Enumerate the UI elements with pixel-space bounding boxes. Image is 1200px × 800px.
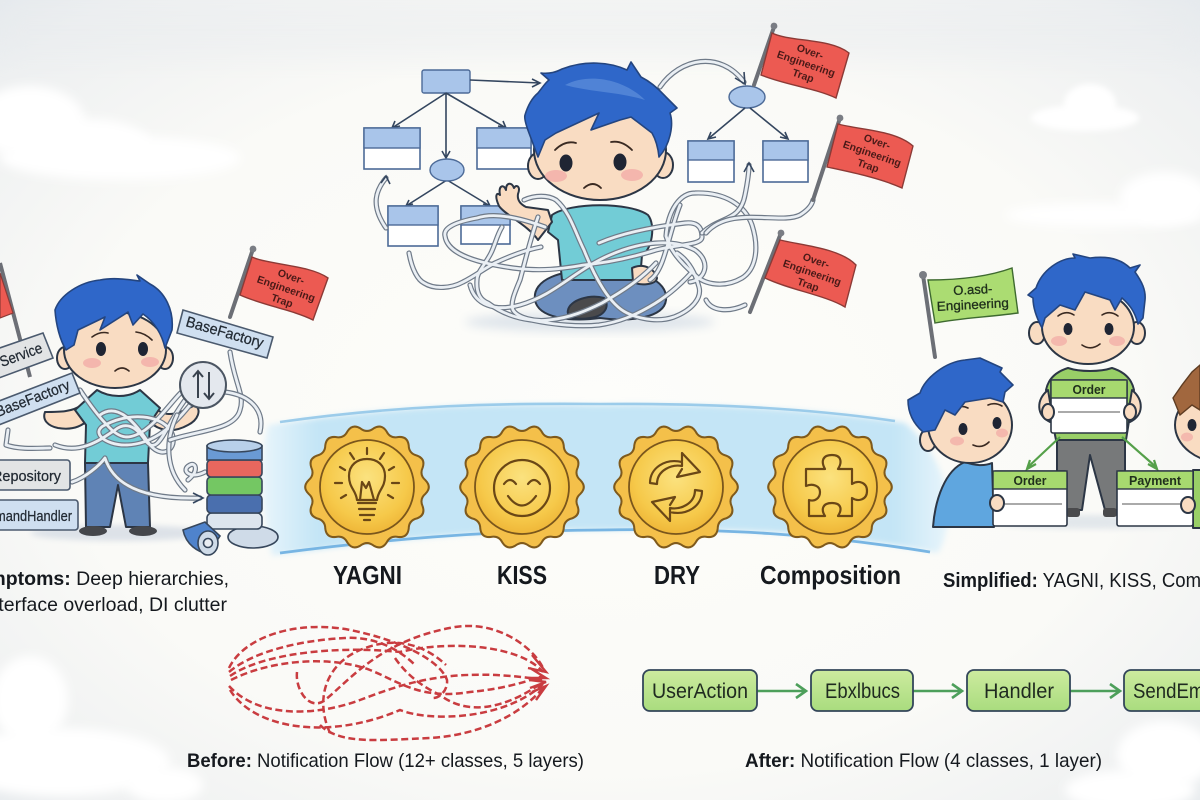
flag: over-engineering trap 1: Trap (791, 67, 815, 85)
card: Order (993, 471, 1067, 526)
icon: refresh arrows (650, 453, 702, 521)
database stack (183, 440, 278, 555)
label: Repository (0, 460, 70, 490)
ground shadow (465, 312, 715, 332)
legs (535, 271, 666, 319)
flag: over-engineering trap 1: Engineering (775, 49, 837, 80)
arrowheads (528, 655, 546, 700)
face (64, 312, 166, 388)
icon: light bulb (335, 448, 399, 520)
flag: over-engineering trap: Trap (270, 292, 294, 310)
after diagram: simple flow (643, 670, 1200, 711)
flag: over-engineering trap 3: Over- (801, 251, 831, 271)
badge labels: KISS (497, 560, 547, 590)
ears (1029, 322, 1145, 344)
flag: over-engineering trap 1: Over- (795, 42, 825, 62)
flag: over-engineering trap: Over- (276, 267, 306, 287)
middle child (1028, 254, 1145, 517)
badge labels: Composition (760, 560, 901, 590)
flag: over-engineering trap 2: Engineering (841, 139, 903, 170)
blush left (545, 170, 567, 182)
card: Order (1051, 380, 1127, 433)
sad mouth (584, 184, 601, 188)
card: Order: Order (1014, 473, 1046, 488)
card: Order: Order (1072, 382, 1106, 397)
ear (920, 429, 936, 451)
ground shadow (30, 525, 210, 541)
wires from the tangle to right chart and flags (702, 163, 813, 310)
shirt (1046, 368, 1134, 440)
green arrows (1027, 437, 1157, 469)
wires (409, 193, 756, 326)
arrows (757, 684, 1120, 698)
ground shadow (990, 515, 1190, 529)
pants (85, 463, 150, 527)
shirt (75, 390, 160, 463)
box: EventBus (811, 670, 913, 711)
shoe (568, 297, 607, 319)
pants (1057, 438, 1125, 510)
badge labels: DRY (654, 560, 700, 590)
eyes and smile (952, 404, 1002, 446)
box: EventBus: Ebxlbucs (825, 680, 900, 703)
left flag (0, 263, 30, 377)
center scene: flowchart on left (364, 70, 540, 246)
box: Handler (967, 670, 1070, 711)
badge labels: YAGNI (333, 560, 402, 590)
hair (55, 275, 172, 350)
hair (1028, 254, 1145, 328)
hair (908, 358, 1013, 432)
face (1042, 290, 1134, 364)
hand (1181, 497, 1195, 513)
blush right (621, 169, 643, 181)
eye (1188, 419, 1196, 431)
eyes and brows (555, 142, 632, 172)
eyes and smile (1058, 313, 1118, 348)
arms and hands (44, 405, 199, 430)
gold badge: Composition (768, 427, 892, 547)
shirt (548, 205, 652, 280)
blush (1181, 432, 1193, 442)
body (1193, 470, 1200, 528)
label: Service (0, 333, 53, 382)
mouth and brows (92, 332, 152, 371)
box: UserAction (643, 670, 757, 711)
green flag: Engineering (936, 295, 1009, 314)
card: Payment (1117, 471, 1193, 526)
center scene: flowchart on right (660, 61, 808, 182)
flag: over-engineering trap 3: Trap (796, 276, 820, 294)
right child (brown hair) (1117, 365, 1200, 528)
flag: over-engineering trap 2 (813, 115, 913, 200)
ear left (528, 153, 548, 179)
icon: puzzle piece (806, 455, 867, 516)
shoes (79, 526, 157, 536)
center child tangled in wires (409, 62, 756, 332)
flag: over-engineering trap 3: Engineering (781, 258, 843, 289)
symptoms caption (0, 568, 229, 616)
box: Handler: Handler (984, 680, 1054, 703)
icon: smiley (494, 460, 550, 516)
ear right (653, 152, 673, 178)
hand (990, 495, 1004, 511)
ears (57, 347, 173, 369)
wire tangle (6, 352, 261, 503)
hair (525, 62, 677, 157)
left scene: child with factory labels (0, 246, 328, 555)
arms (1039, 390, 1141, 422)
flag: over-engineering trap (230, 246, 328, 320)
gold badge: DRY (614, 427, 738, 547)
flag: over-engineering trap 1 (754, 23, 849, 98)
badge labels (333, 560, 901, 590)
face (534, 100, 666, 200)
flag: over-engineering trap 2: Trap (856, 157, 880, 175)
label: BaseFactory right: BaseFactory (184, 314, 266, 352)
hair highlight (565, 79, 645, 100)
eyes (96, 342, 148, 356)
brown hair (1173, 365, 1200, 415)
before caption: Before: Notification Flow (12+ classes, 5 layers) (187, 750, 584, 772)
gold badge: YAGNI (305, 427, 429, 547)
after caption: After: Notification Flow (4 classes, 1 layer) (745, 750, 1102, 772)
green flag (919, 268, 1018, 357)
face (1175, 387, 1200, 463)
before diagram: tangled red dashed flow (229, 626, 546, 740)
raised arm and hand (496, 184, 552, 240)
blush (950, 428, 1008, 446)
box: SendEmail (1124, 670, 1200, 711)
blush (1051, 336, 1125, 346)
label: CommandHandler (0, 500, 78, 530)
lap hand (632, 266, 657, 284)
box: UserAction: UserAction (652, 680, 748, 703)
hands on card (1042, 404, 1136, 420)
blue shirt (933, 462, 994, 527)
flag: over-engineering trap 3 (750, 230, 856, 312)
flag: over-engineering trap 2: Over- (862, 132, 892, 152)
blush (83, 357, 159, 368)
right scene: simplified team (908, 254, 1200, 529)
principles river band (262, 404, 948, 556)
left child (908, 358, 1067, 527)
shoes (1066, 508, 1117, 517)
green flag: O.asd- (953, 281, 993, 298)
face (928, 387, 1012, 463)
card: Payment: Payment (1129, 473, 1182, 488)
gold badge: KISS (460, 427, 584, 547)
round gear node (180, 362, 226, 408)
flag: over-engineering trap: Engineering (255, 274, 317, 305)
